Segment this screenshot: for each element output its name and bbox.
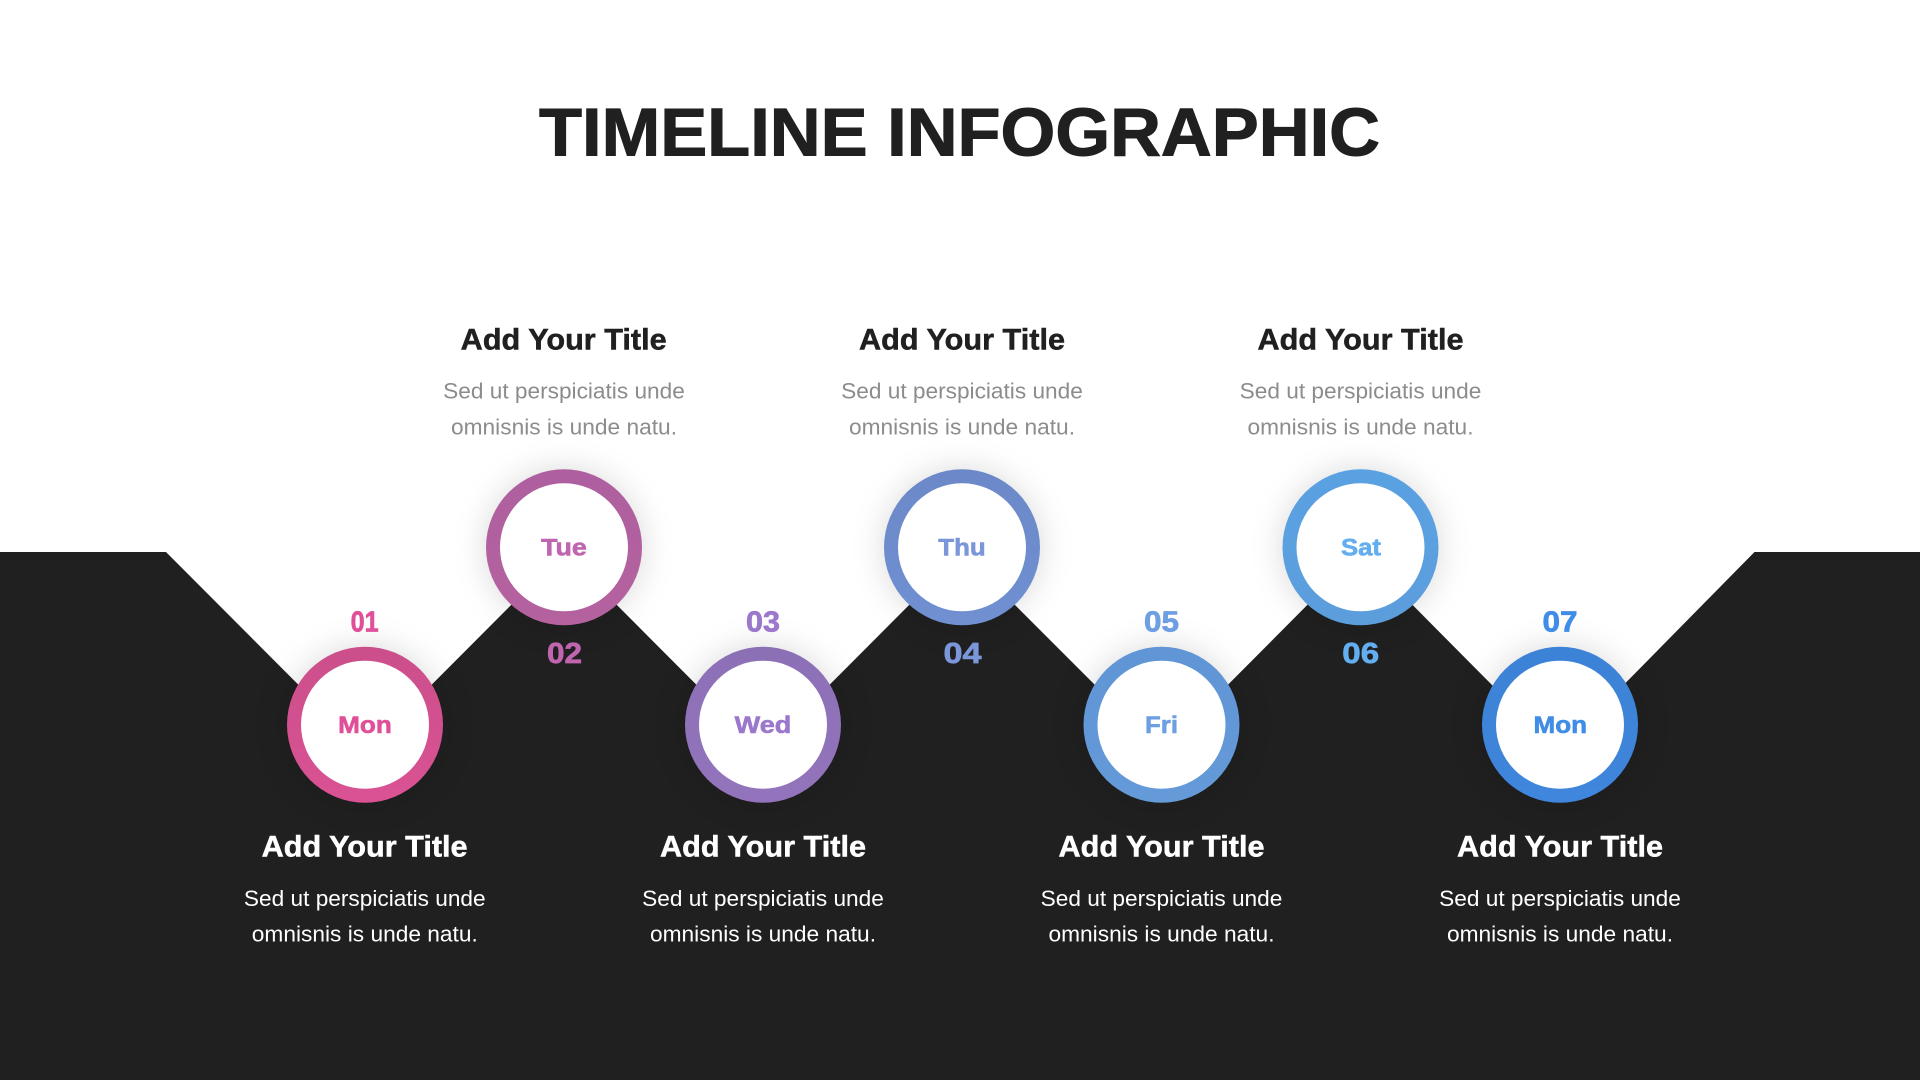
step body text: omnisnis is unde natu. (849, 415, 1075, 440)
step number: 01 (351, 607, 379, 639)
day label: Tue (541, 534, 587, 562)
step body text (841, 378, 1083, 440)
step heading: Add Your Title (1258, 323, 1464, 356)
day label: Thu (938, 534, 986, 562)
step body text (642, 886, 884, 947)
ring marker (884, 469, 1040, 625)
step body text (244, 886, 486, 947)
step body text: Sed ut perspiciatis unde (1439, 886, 1681, 911)
step body text: omnisnis is unde natu. (1447, 922, 1673, 947)
step body text: omnisnis is unde natu. (650, 922, 876, 947)
step 03: Wed (642, 607, 884, 947)
step body text: Sed ut perspiciatis unde (841, 378, 1083, 403)
step 01: Mon (244, 607, 486, 947)
step heading: Add Your Title (660, 830, 866, 864)
step 07: Mon (1439, 607, 1681, 947)
ring marker (1084, 647, 1240, 803)
step body text: Sed ut perspiciatis unde (244, 886, 486, 911)
step heading: Add Your Title (859, 323, 1065, 356)
ring marker (1482, 647, 1638, 803)
step 04: Thu (841, 323, 1083, 670)
ring marker (1282, 469, 1438, 625)
step body text: Sed ut perspiciatis unde (443, 378, 685, 403)
step heading: Add Your Title (461, 323, 667, 356)
ring marker (486, 469, 642, 625)
step body text (443, 378, 685, 440)
day label: Mon (338, 712, 392, 739)
day label: Fri (1145, 712, 1178, 739)
step body text: Sed ut perspiciatis unde (1240, 378, 1481, 403)
step number: 04 (944, 638, 982, 670)
step body text (1041, 886, 1282, 947)
day label: Wed (735, 712, 791, 739)
step number: 03 (746, 607, 780, 639)
day label: Sat (1341, 534, 1381, 562)
step body text (1240, 378, 1481, 440)
step 05: Fri (1041, 607, 1282, 947)
step body text: Sed ut perspiciatis unde (1041, 886, 1282, 911)
day label: Mon (1534, 712, 1587, 739)
step number: 05 (1144, 607, 1179, 639)
step heading: Add Your Title (1457, 830, 1663, 864)
step body text: omnisnis is unde natu. (1248, 415, 1474, 440)
step number: 06 (1342, 638, 1379, 670)
title: TIMELINE INFOGRAPHIC (539, 95, 1380, 171)
step heading: Add Your Title (262, 830, 468, 864)
dark zigzag panel (0, 552, 1920, 1080)
step 02: Tue (443, 323, 685, 670)
step number: 02 (547, 638, 582, 670)
step number: 07 (1542, 607, 1578, 639)
step body text: omnisnis is unde natu. (252, 922, 478, 947)
step body text (1439, 886, 1681, 947)
step body text: Sed ut perspiciatis unde (642, 886, 884, 911)
ring marker (287, 647, 443, 803)
step heading: Add Your Title (1058, 830, 1264, 864)
step body text: omnisnis is unde natu. (1048, 922, 1274, 947)
step 06: Sat (1240, 323, 1481, 670)
step body text: omnisnis is unde natu. (451, 415, 677, 440)
ring marker (685, 647, 841, 803)
